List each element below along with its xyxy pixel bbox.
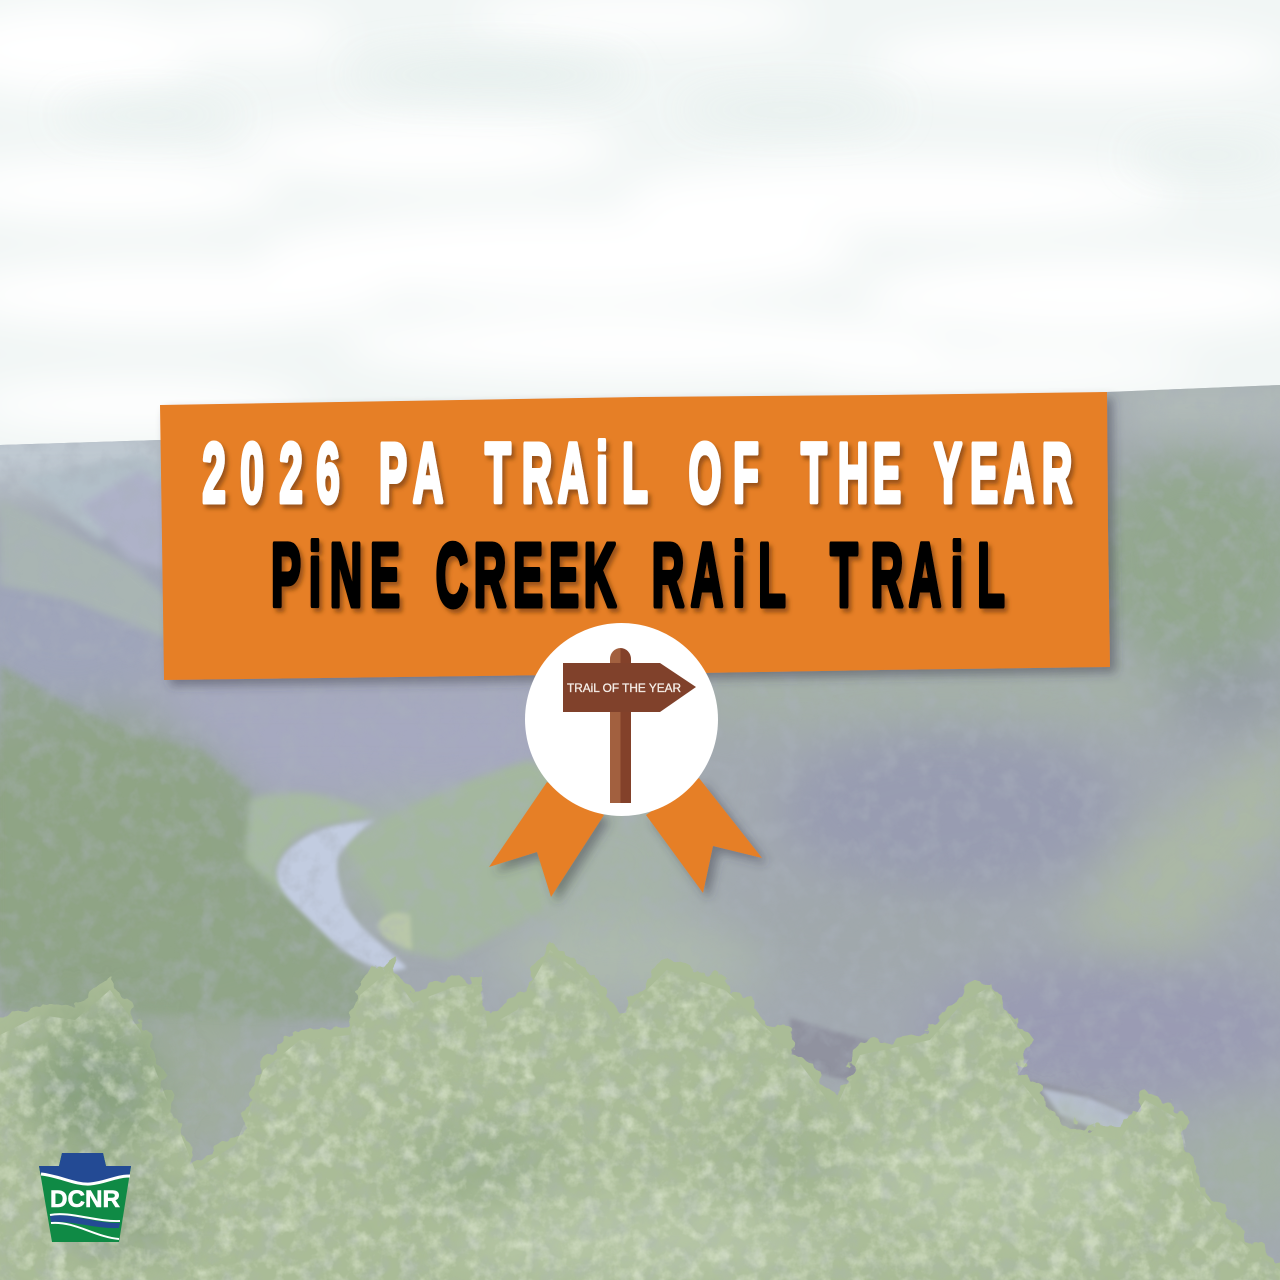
sign text: TRAiL OF THE YEAR [567, 681, 681, 695]
ribbon tails [489, 778, 762, 897]
signpost [610, 648, 631, 803]
heading: Pine Creek Rail Trail: PiNE CREEK RAiL TRAiL [271, 526, 1005, 626]
badge with trail sign [525, 623, 718, 816]
foreground tree shading [30, 1015, 1140, 1280]
river banks [244, 758, 554, 958]
background photo: sky [0, 0, 1280, 460]
background photo: foreground trees [0, 940, 1280, 1280]
river [277, 820, 407, 972]
heading: 2026 PA Trail of the Year: 2026 PA TRAiL OF THE YEAR [202, 427, 1072, 521]
land texture [0, 462, 1280, 1209]
left ridges [0, 455, 380, 1020]
background photo: hills and valley [0, 380, 1280, 1280]
left ribbon tail [489, 782, 604, 897]
sign board [563, 663, 696, 712]
foreground tree highlights [0, 930, 1280, 1280]
right ribbon tail [646, 778, 762, 893]
island sandbar [377, 912, 412, 950]
logo lettering: DCNR [50, 1186, 120, 1213]
logo: DCNR keystone [39, 1153, 131, 1242]
orange title banner [160, 392, 1110, 680]
river, far bend [790, 1018, 1130, 1133]
